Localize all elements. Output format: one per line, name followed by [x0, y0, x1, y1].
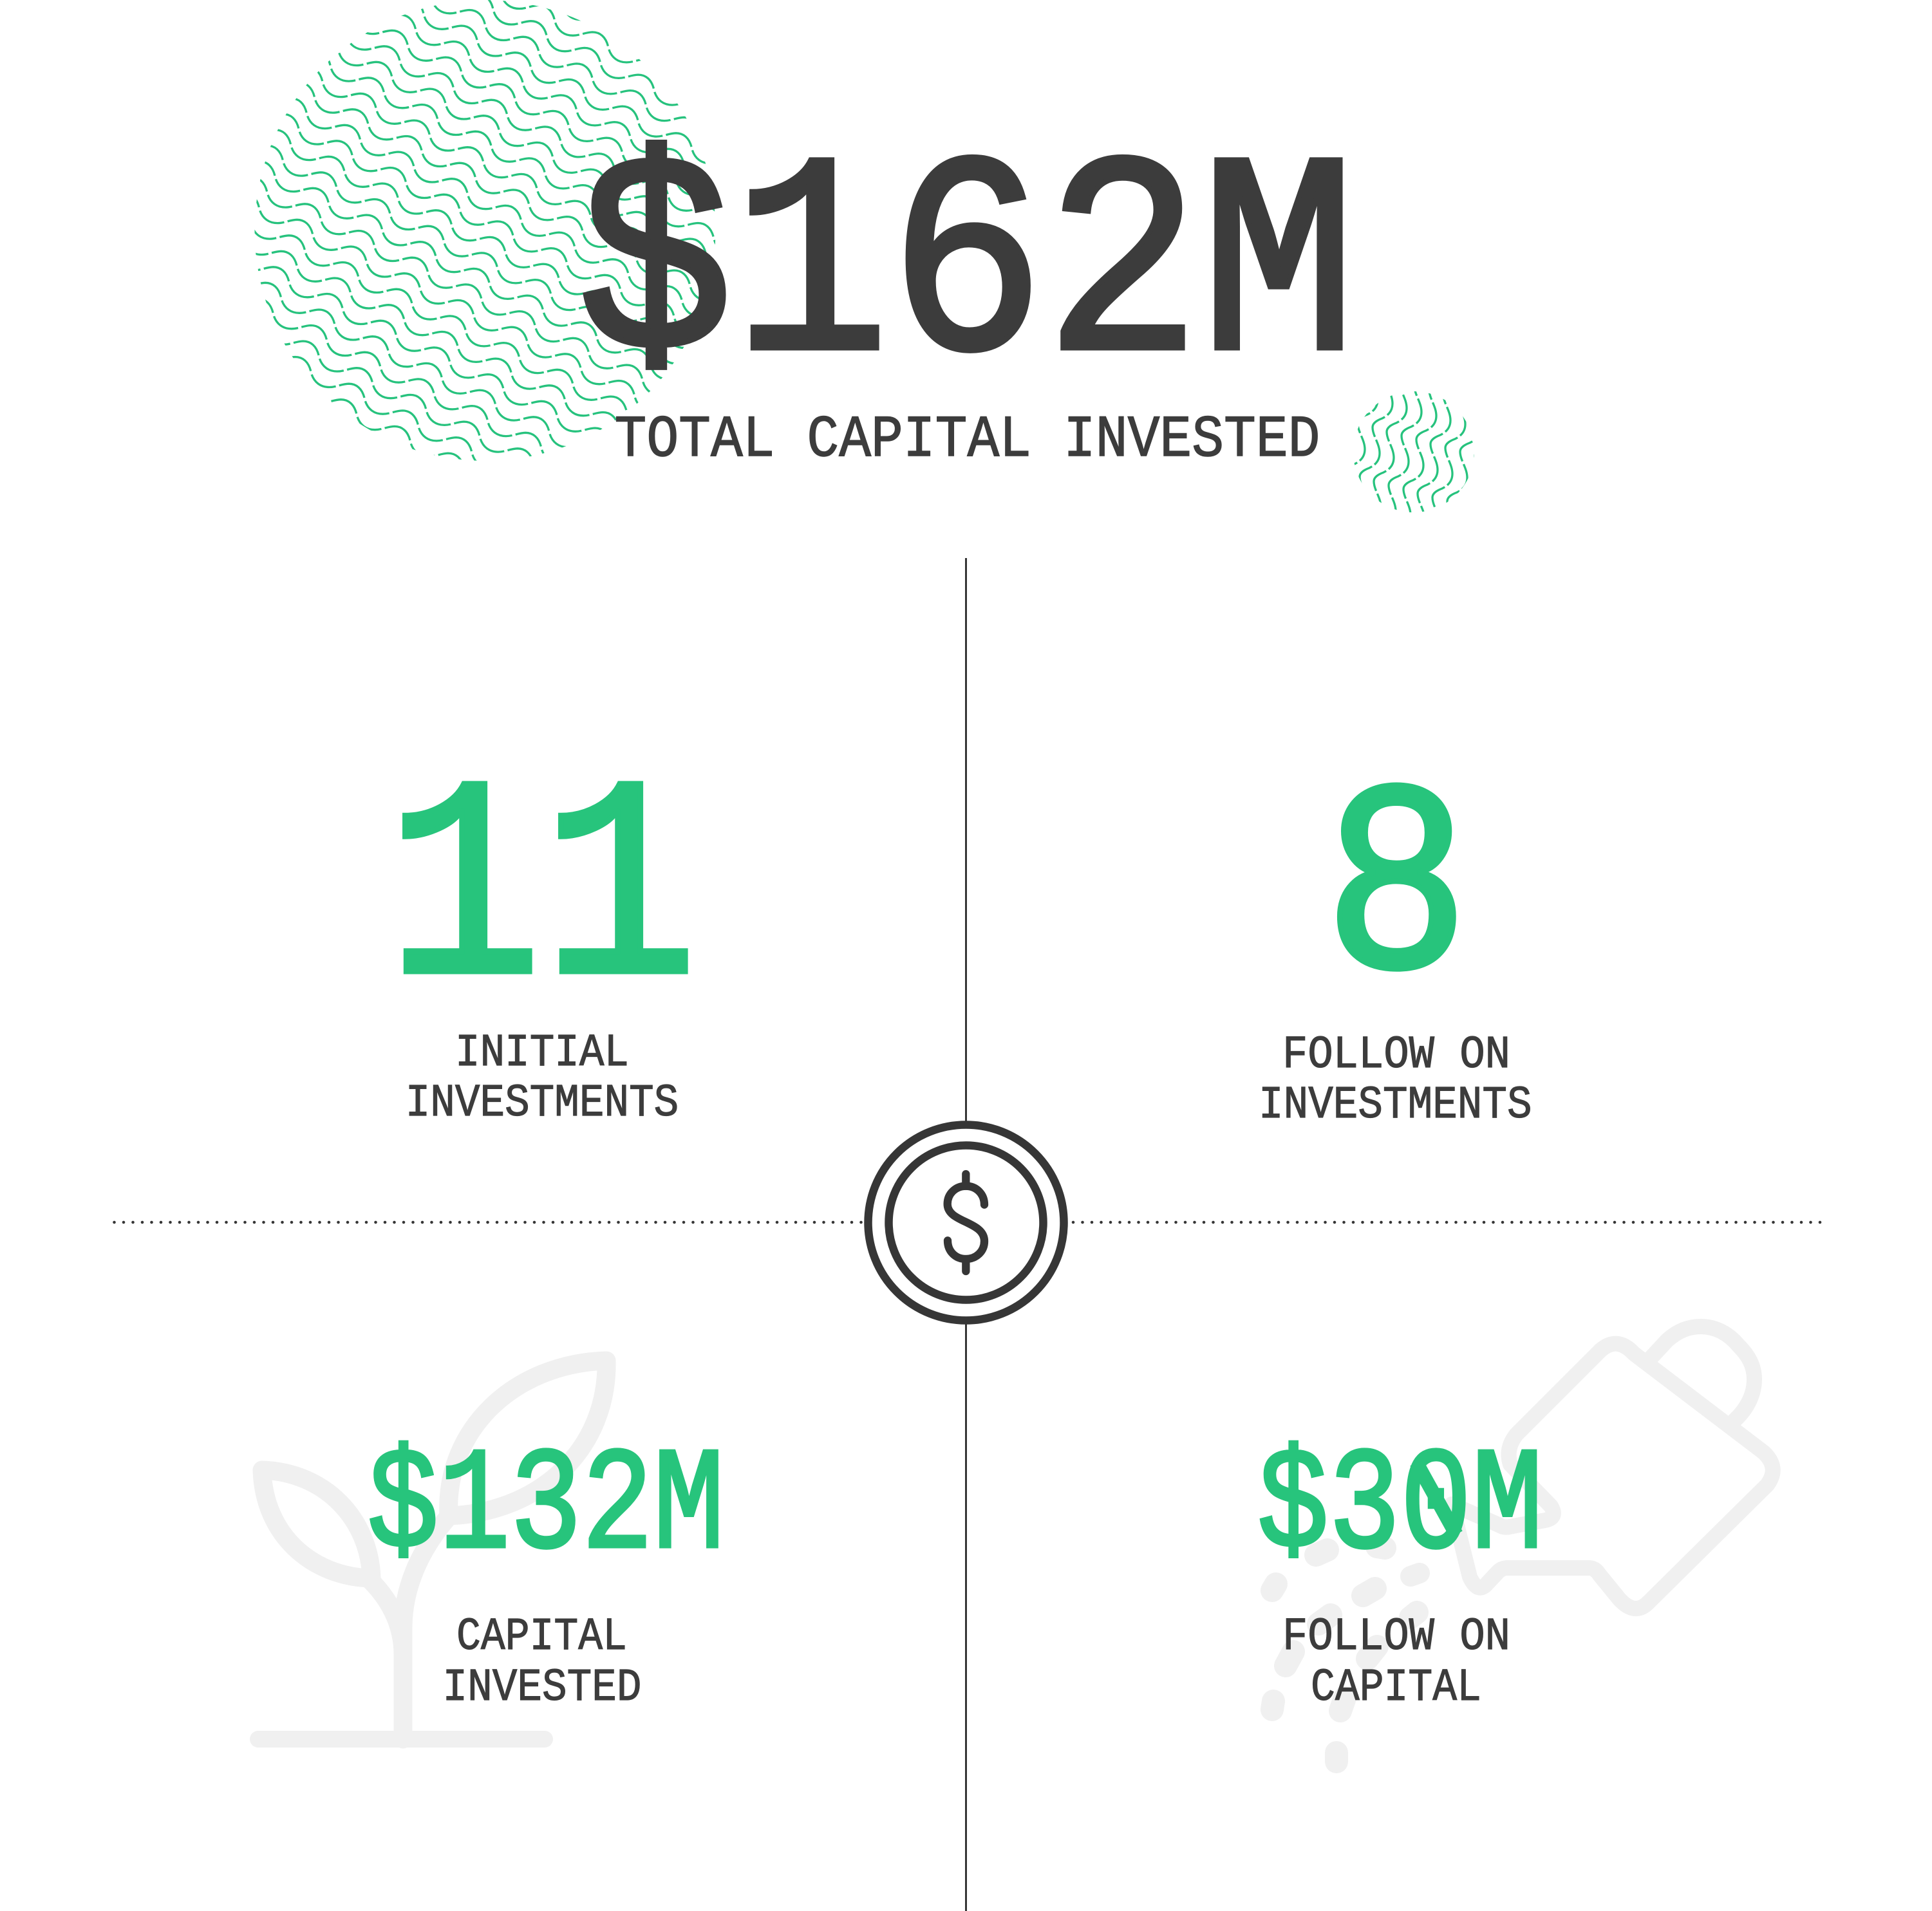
- stat: 8 follow on investments: FOLLOW ON: [1282, 1030, 1510, 1081]
- stat: 11 initial investments: INITIAL: [455, 1028, 629, 1079]
- stat: 8 follow on investments: [1259, 741, 1532, 1132]
- stat: 11 initial investments: 11: [386, 734, 698, 1057]
- headline: $162M: $162M: [577, 111, 1356, 433]
- stat: $30M follow on capital: CAPITAL: [1311, 1663, 1481, 1714]
- divider: vertical upper: [965, 558, 967, 1123]
- icon: plant sprout: [258, 1361, 606, 1739]
- stat: $30M follow on capital: FOLLOW ON: [1282, 1612, 1510, 1663]
- stat: $132M capital invested: INVESTED: [443, 1663, 641, 1714]
- stat: $132M capital invested: [367, 1426, 725, 1714]
- subtitle: total capital invested: TOTAL CAPITAL INVESTED: [614, 406, 1320, 474]
- divider: dotted left: [115, 1221, 863, 1224]
- stat: 8 follow on investments: INVESTMENTS: [1259, 1080, 1532, 1132]
- stat: $30M follow on capital: [1257, 1426, 1543, 1714]
- wave pattern circle: small: [1355, 391, 1474, 512]
- wave pattern circle: large: [255, 0, 716, 461]
- stat: 8 follow on investments: 8: [1324, 741, 1469, 1048]
- icon: watering can: [1272, 1327, 1773, 1762]
- icon: dollar coin: [868, 1125, 1064, 1321]
- divider: dotted right: [1073, 1221, 1821, 1224]
- stat: $30M follow on capital: $30M: [1257, 1426, 1543, 1590]
- stat: 11 initial investments: INVESTMENTS: [406, 1078, 679, 1130]
- stat: $132M capital invested: CAPITAL: [456, 1612, 627, 1663]
- stat: $132M capital invested: $132M: [367, 1426, 725, 1590]
- divider: vertical lower: [965, 1322, 967, 1911]
